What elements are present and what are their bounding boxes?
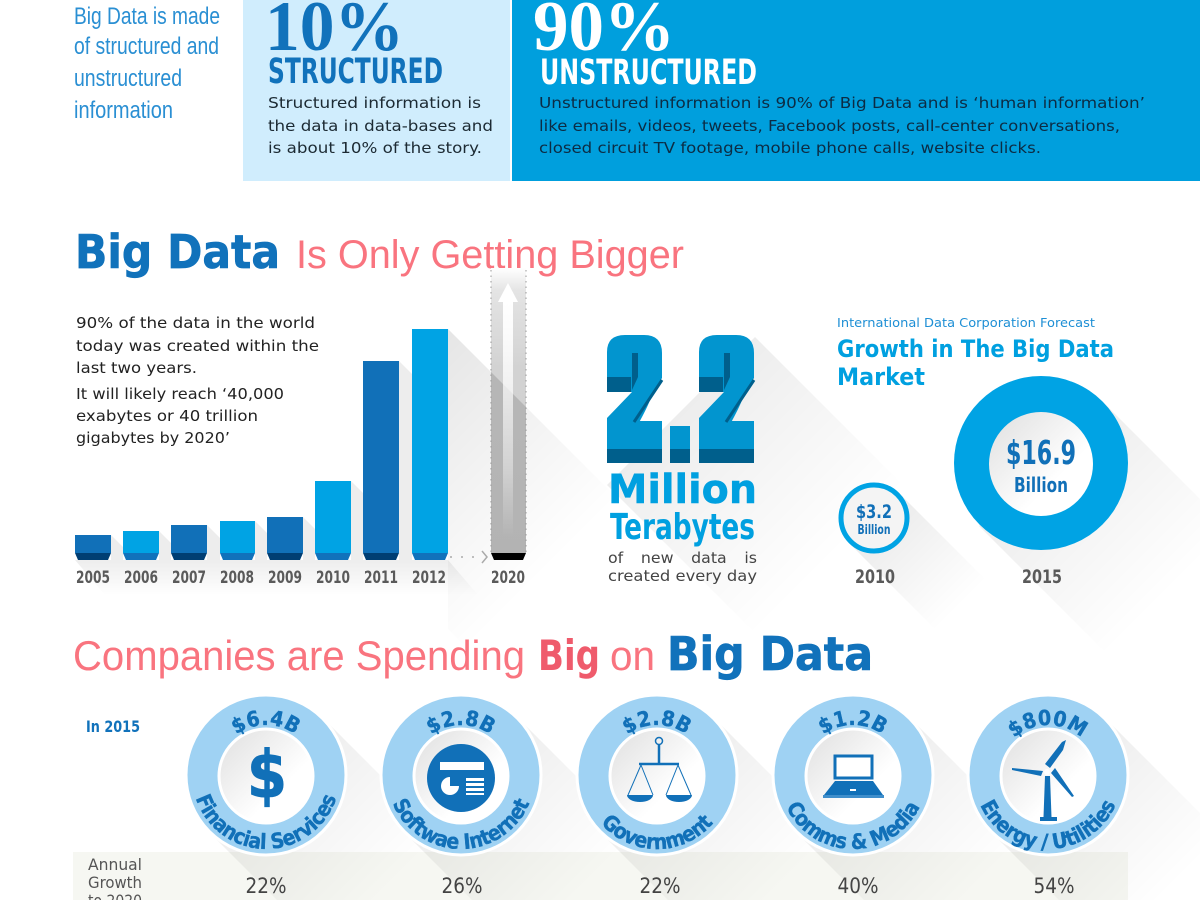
row label: Growth bbox=[88, 873, 142, 892]
terabytes label: Terabytes bbox=[610, 507, 755, 548]
heading: market forecast: Growth in The Big Data bbox=[837, 335, 1114, 363]
column: 2020 forecast bbox=[491, 268, 526, 560]
heading: companies spending bbox=[73, 627, 873, 681]
sector name: Government bbox=[604, 815, 714, 850]
sector: financial services bbox=[188, 696, 348, 856]
unstructured description bbox=[539, 94, 1145, 157]
year labels: 2012 bbox=[412, 568, 446, 588]
icon: dollar sign: $ bbox=[247, 738, 287, 813]
icon: software dashboard bbox=[427, 744, 495, 812]
heading: getting bigger: Is Only Getting Bigger bbox=[296, 233, 684, 277]
amount: $1.2B bbox=[819, 710, 887, 734]
growth figures: 22% bbox=[246, 874, 286, 898]
intro paragraph: data growth: today was created within the bbox=[76, 337, 319, 355]
intro text: Big Data is made bbox=[74, 3, 220, 30]
growth figures bbox=[246, 874, 1074, 898]
caption: created every day bbox=[608, 567, 757, 585]
structured label: STRUCTURED bbox=[268, 52, 443, 92]
structured description: the data in data-bases and bbox=[268, 117, 493, 135]
row label bbox=[88, 855, 142, 900]
chart: 2015 market size: 2015 bbox=[1022, 566, 1062, 588]
icon: laptop bbox=[823, 756, 884, 798]
sector name: Comms & Media bbox=[788, 802, 920, 850]
chart: 2010 market size bbox=[841, 485, 907, 588]
structured description: is about 10% of the story. bbox=[268, 139, 482, 157]
amount: $6.4B bbox=[232, 710, 300, 734]
intro paragraph: data growth: last two years. bbox=[76, 359, 197, 377]
chart: 2015 market size bbox=[954, 376, 1128, 588]
year labels: 2010 bbox=[316, 568, 350, 588]
million label: Million bbox=[608, 467, 757, 513]
sector name: Softwae Internet bbox=[394, 798, 530, 850]
sector: software internet bbox=[380, 696, 542, 856]
year labels: 2011 bbox=[364, 568, 398, 588]
year labels bbox=[76, 568, 525, 588]
year labels: 2020 bbox=[491, 568, 525, 588]
big number: 2 bbox=[607, 307, 662, 503]
big number: . bbox=[664, 307, 696, 503]
year labels: 2009 bbox=[268, 568, 302, 588]
intro paragraph: data growth: 90% of the data in the world bbox=[76, 314, 315, 332]
shadows: market circles bbox=[849, 402, 1200, 656]
year labels: 2006 bbox=[124, 568, 158, 588]
icon: up arrow bbox=[498, 283, 518, 537]
shadows: sector circles bbox=[209, 718, 1200, 900]
bar chart: data by year bbox=[75, 329, 525, 588]
chart: 2010 market size: Billion bbox=[858, 523, 890, 538]
year labels: 2005 bbox=[76, 568, 110, 588]
structured description bbox=[268, 94, 493, 157]
heading: companies spending: Big bbox=[538, 631, 600, 680]
heading: market forecast bbox=[837, 316, 1114, 391]
unstructured label: UNSTRUCTURED bbox=[540, 53, 757, 93]
heading: getting bigger bbox=[75, 225, 684, 279]
sector name: Financial Services bbox=[196, 794, 336, 850]
unstructured description: closed circuit TV footage, mobile phone calls, website clicks. bbox=[539, 139, 1041, 157]
heading: getting bigger: Big Data bbox=[75, 225, 280, 279]
arrow: dotted connector to 2020 bbox=[450, 551, 487, 563]
unstructured description: like emails, videos, tweets, Facebook posts, call-center conversations, bbox=[539, 117, 1120, 135]
sector: energy and utilities bbox=[966, 696, 1130, 856]
growth figures: 26% bbox=[442, 874, 482, 898]
chart: 2015 market size: $16.9 bbox=[1006, 433, 1076, 472]
amount: $2.8B bbox=[623, 710, 691, 734]
stat: 2.2 million terabytes bbox=[607, 307, 757, 585]
intro text: information bbox=[74, 97, 173, 124]
shadow: 2.2 figure bbox=[607, 337, 905, 635]
chart: 2010 market size: $3.2 bbox=[856, 501, 892, 523]
row label: Annual bbox=[88, 855, 142, 874]
panel: unstructured bbox=[512, 0, 1200, 181]
caption: of new data is bbox=[608, 549, 757, 567]
intro paragraph: data growth bbox=[76, 314, 319, 447]
heading: market forecast: International Data Corporation Forecast bbox=[837, 316, 1095, 330]
text: 2 bbox=[699, 307, 754, 503]
bar shadows bbox=[75, 329, 618, 649]
intro paragraph: data growth: gigabytes by 2020’ bbox=[76, 429, 230, 447]
label: in 2015: In 2015 bbox=[86, 717, 140, 736]
heading: companies spending: Companies are Spending bbox=[73, 632, 525, 679]
amount: $800M bbox=[1008, 709, 1088, 738]
icon: wind turbine bbox=[1012, 740, 1074, 821]
bars bbox=[75, 329, 448, 560]
sector name: Energy / Utilities bbox=[980, 798, 1115, 851]
amount: $2.8B bbox=[427, 710, 495, 734]
year labels: 2008 bbox=[220, 568, 254, 588]
table band: annual growth bbox=[73, 852, 1128, 900]
panel: structured bbox=[243, 0, 510, 181]
chart: 2010 market size: 2010 bbox=[855, 566, 895, 588]
intro text bbox=[74, 3, 220, 124]
growth figures: 40% bbox=[838, 874, 878, 898]
year labels: 2007 bbox=[172, 568, 206, 588]
intro paragraph: data growth: exabytes or 40 trillion bbox=[76, 407, 258, 425]
caption bbox=[608, 549, 757, 585]
chart: 2015 market size: Billion bbox=[1014, 473, 1068, 497]
intro paragraph: data growth: It will likely reach ‘40,000 bbox=[76, 385, 284, 403]
unstructured description: Unstructured information is 90% of Big Data and is ‘human information’ bbox=[539, 94, 1145, 112]
icon: scales bbox=[627, 738, 692, 802]
sector: comms and media bbox=[772, 696, 934, 856]
sector: government bbox=[576, 696, 738, 856]
heading: companies spending: Big Data bbox=[667, 627, 873, 681]
heading: companies spending: on bbox=[610, 632, 655, 679]
structured description: Structured information is bbox=[268, 94, 481, 112]
intro text: unstructured bbox=[74, 65, 182, 92]
intro text: of structured and bbox=[74, 33, 219, 60]
growth figures: 22% bbox=[640, 874, 680, 898]
growth figures: 54% bbox=[1034, 874, 1074, 898]
heading: market forecast: Market bbox=[837, 363, 925, 391]
